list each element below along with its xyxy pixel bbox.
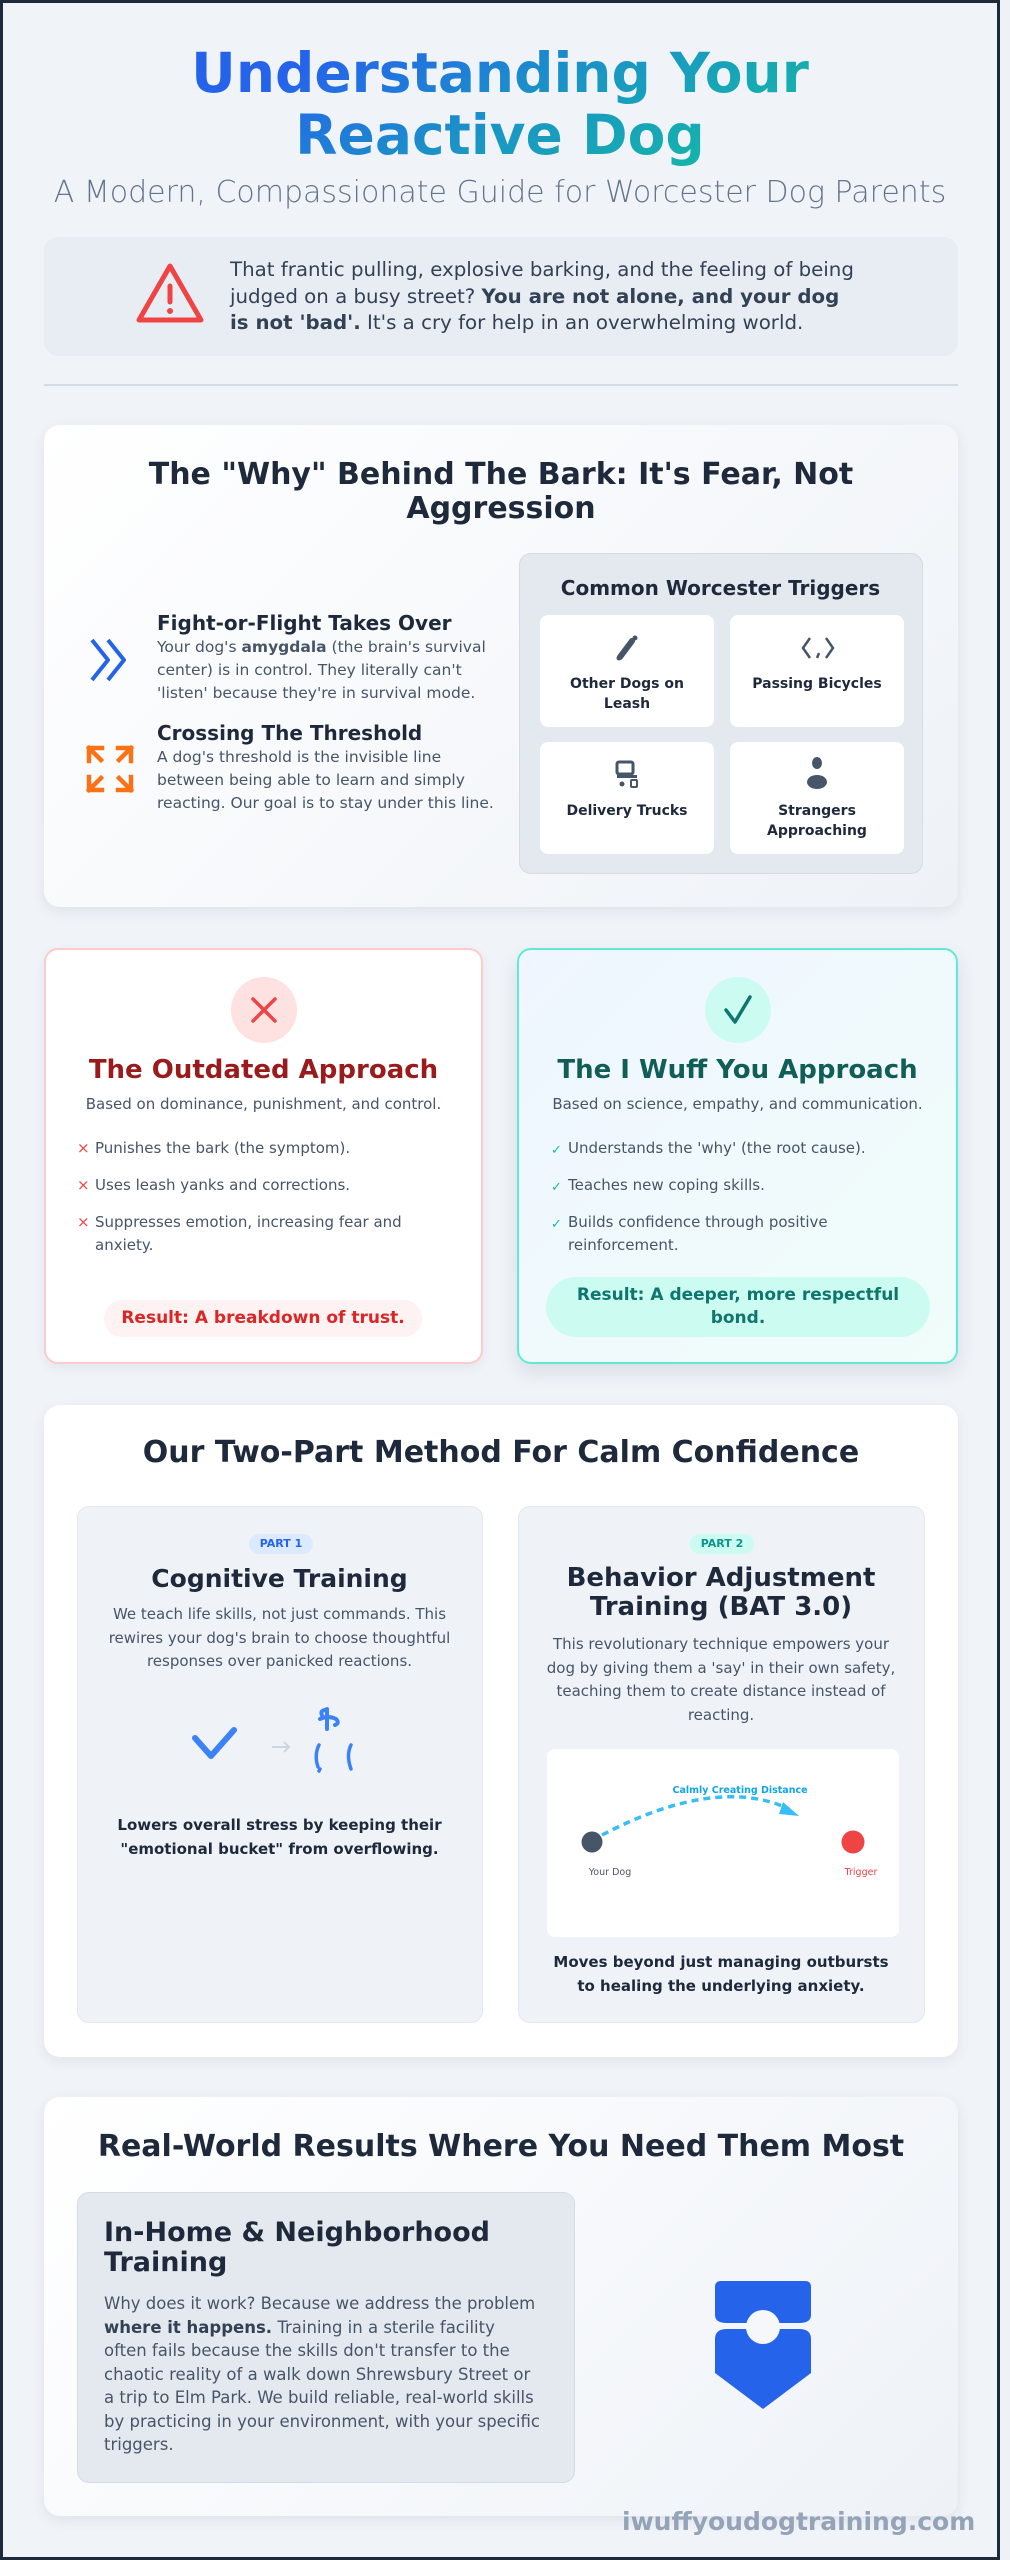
bold caption: Moves beyond just managing outbursts xyxy=(553,1953,889,1971)
bold caption: to healing the underlying anxiety. xyxy=(577,1977,865,1995)
list: anxiety. xyxy=(95,1236,153,1254)
heading: Our Two-Part Method For Calm Confidence xyxy=(143,1435,859,1470)
list: × xyxy=(77,1213,90,1231)
body xyxy=(547,1635,895,1724)
body: dog by giving them a 'say' in their own safety, xyxy=(547,1658,895,1676)
tile: other dogs xyxy=(540,615,714,727)
bold caption: "emotional bucket" from overflowing. xyxy=(120,1840,439,1858)
item: fight or flight: Your dog's amygdala (the brain's survival xyxy=(157,638,486,656)
tile: bicycles: Passing Bicycles xyxy=(752,676,882,692)
triggers heading: Common Worcester Triggers xyxy=(561,576,880,600)
body: where it happens. Training in a sterile facility xyxy=(104,2318,495,2336)
diagram: creating distance xyxy=(547,1749,899,1937)
item: threshold: between being able to learn and simply xyxy=(157,771,465,789)
alert box xyxy=(44,237,958,356)
bold caption xyxy=(117,1816,442,1858)
heading: Aggression xyxy=(406,491,596,526)
body: We teach life skills, not just commands. This xyxy=(113,1605,446,1623)
heading xyxy=(148,457,853,526)
title: Cognitive Training xyxy=(151,1564,408,1593)
list: reinforcement. xyxy=(568,1236,679,1254)
item: threshold: A dog's threshold is the invisible line xyxy=(157,748,441,766)
body: chaotic reality of a walk down Shrewsbury Street or xyxy=(104,2364,530,2384)
icon: check to calm figure xyxy=(192,1707,353,1773)
item: threshold: reacting. Our goal is to stay under this line. xyxy=(157,794,494,812)
footer url: iwuffyoudogtraining.com xyxy=(622,2507,975,2536)
subtitle: Based on science, empathy, and communication. xyxy=(552,1095,923,1113)
subtitle: Based on dominance, punishment, and control. xyxy=(86,1095,441,1113)
panel: I Wuff You approach xyxy=(517,948,958,1364)
item: fight or flight: 'listen' because they're in survival mode. xyxy=(157,684,475,702)
diagram: creating distance: Your Dog xyxy=(588,1867,631,1878)
panel: two-part method xyxy=(44,1405,958,2057)
heading: Real-World Results Where You Need Them Most xyxy=(98,2129,904,2164)
heading: The I Wuff You Approach xyxy=(557,1055,918,1085)
body: triggers. xyxy=(104,2435,174,2454)
alert text: That frantic pulling, explosive barking, and the feeling of being xyxy=(230,258,854,281)
title: Training (BAT 3.0) xyxy=(590,1592,852,1622)
title xyxy=(170,42,830,166)
body: often fails because the skills don't transfer to the xyxy=(104,2341,510,2360)
diagram: creating distance: Calmly Creating Distance xyxy=(672,1785,808,1796)
icon: warning triangle xyxy=(136,264,204,322)
diagram: creating distance: Trigger xyxy=(844,1867,877,1878)
body: by practicing in your environment, with your specific xyxy=(104,2412,540,2430)
tile: strangers: Strangers xyxy=(778,803,856,819)
list xyxy=(77,1139,402,1254)
panel: cognitive training xyxy=(77,1506,483,2023)
panel: triggers xyxy=(519,553,923,874)
bold caption: Lowers overall stress by keeping their xyxy=(117,1816,442,1834)
item: fight or flight: center) is in control. They literally can't xyxy=(157,661,462,679)
title xyxy=(104,2217,490,2278)
heading: The Outdated Approach xyxy=(89,1055,438,1085)
result pill: Result: A deeper, more respectful xyxy=(577,1285,899,1305)
bold caption xyxy=(553,1953,889,1995)
title: Reactive Dog xyxy=(295,103,705,167)
icon: expand arrows xyxy=(86,745,134,794)
title: Training xyxy=(104,2247,227,2278)
list: ✓ xyxy=(551,1217,562,1232)
body: teaching them to create distance instead of xyxy=(556,1682,886,1700)
tile: bicycles xyxy=(730,615,904,727)
panel: BAT xyxy=(518,1506,925,2023)
item: threshold: Crossing The Threshold xyxy=(157,721,422,745)
item: fight or flight: Fight-or-Flight Takes Over xyxy=(157,611,452,635)
title: In-Home & Neighborhood xyxy=(104,2217,490,2248)
list: Understands the 'why' (the root cause). xyxy=(568,1139,866,1157)
icon: location pin xyxy=(715,2281,811,2409)
body: a trip to Elm Park. We build reliable, real-world skills xyxy=(104,2388,534,2407)
list: Builds confidence through positive xyxy=(568,1213,828,1231)
icon: double chevron xyxy=(90,638,126,682)
result pill xyxy=(104,1300,422,1337)
badge xyxy=(249,1534,313,1554)
result pill: Result: A breakdown of trust. xyxy=(121,1308,405,1328)
alert text xyxy=(230,258,854,334)
subtitle: A Modern, Compassionate Guide for Worcester Dog Parents xyxy=(54,175,946,210)
body: This revolutionary technique empowers your xyxy=(553,1635,889,1653)
tile: delivery trucks: Delivery Trucks xyxy=(566,803,688,819)
tile: other dogs: Leash xyxy=(604,696,650,712)
body: rewires your dog's brain to choose thoughtful xyxy=(109,1628,450,1646)
badge xyxy=(690,1534,754,1554)
title: Understanding Your xyxy=(191,41,809,105)
title: Behavior Adjustment xyxy=(567,1563,875,1593)
badge: PART 1 xyxy=(260,1537,302,1550)
body xyxy=(104,2294,540,2454)
tile: strangers: Approaching xyxy=(767,823,867,839)
list: Punishes the bark (the symptom). xyxy=(95,1139,350,1157)
list: Uses leash yanks and corrections. xyxy=(95,1176,350,1194)
tile: delivery trucks xyxy=(540,742,714,854)
list: ✓ xyxy=(551,1180,562,1195)
body xyxy=(109,1605,450,1670)
panel: in-home training xyxy=(77,2192,575,2483)
alert text: is not 'bad'. It's a cry for help in an overwhelming world. xyxy=(230,311,803,334)
list: Suppresses emotion, increasing fear and xyxy=(95,1213,402,1231)
result pill: bond. xyxy=(711,1308,765,1328)
tile: other dogs: Other Dogs on xyxy=(570,676,684,692)
body: Why does it work? Because we address the problem xyxy=(104,2294,535,2313)
title xyxy=(567,1563,875,1622)
heading: The "Why" Behind The Bark: It's Fear, Not xyxy=(149,457,853,492)
list: × xyxy=(77,1176,90,1194)
body: responses over panicked reactions. xyxy=(147,1652,412,1670)
badge: PART 2 xyxy=(701,1537,743,1550)
item: threshold xyxy=(157,721,494,812)
result pill xyxy=(546,1277,930,1337)
list: ✓ xyxy=(551,1143,562,1158)
list xyxy=(551,1139,866,1254)
list: × xyxy=(77,1139,90,1157)
body: reacting. xyxy=(688,1706,754,1724)
tile: strangers xyxy=(730,742,904,854)
alert text: judged on a busy street? You are not alone, and your dog xyxy=(230,284,839,308)
list: Teaches new coping skills. xyxy=(568,1176,765,1194)
icon: check circle xyxy=(705,977,771,1043)
icon: x circle xyxy=(231,977,297,1043)
item: fight or flight xyxy=(157,611,486,702)
panel: why behind the bark xyxy=(44,425,958,907)
panel: outdated approach xyxy=(44,948,483,1364)
panel: real-world results xyxy=(44,2097,958,2516)
